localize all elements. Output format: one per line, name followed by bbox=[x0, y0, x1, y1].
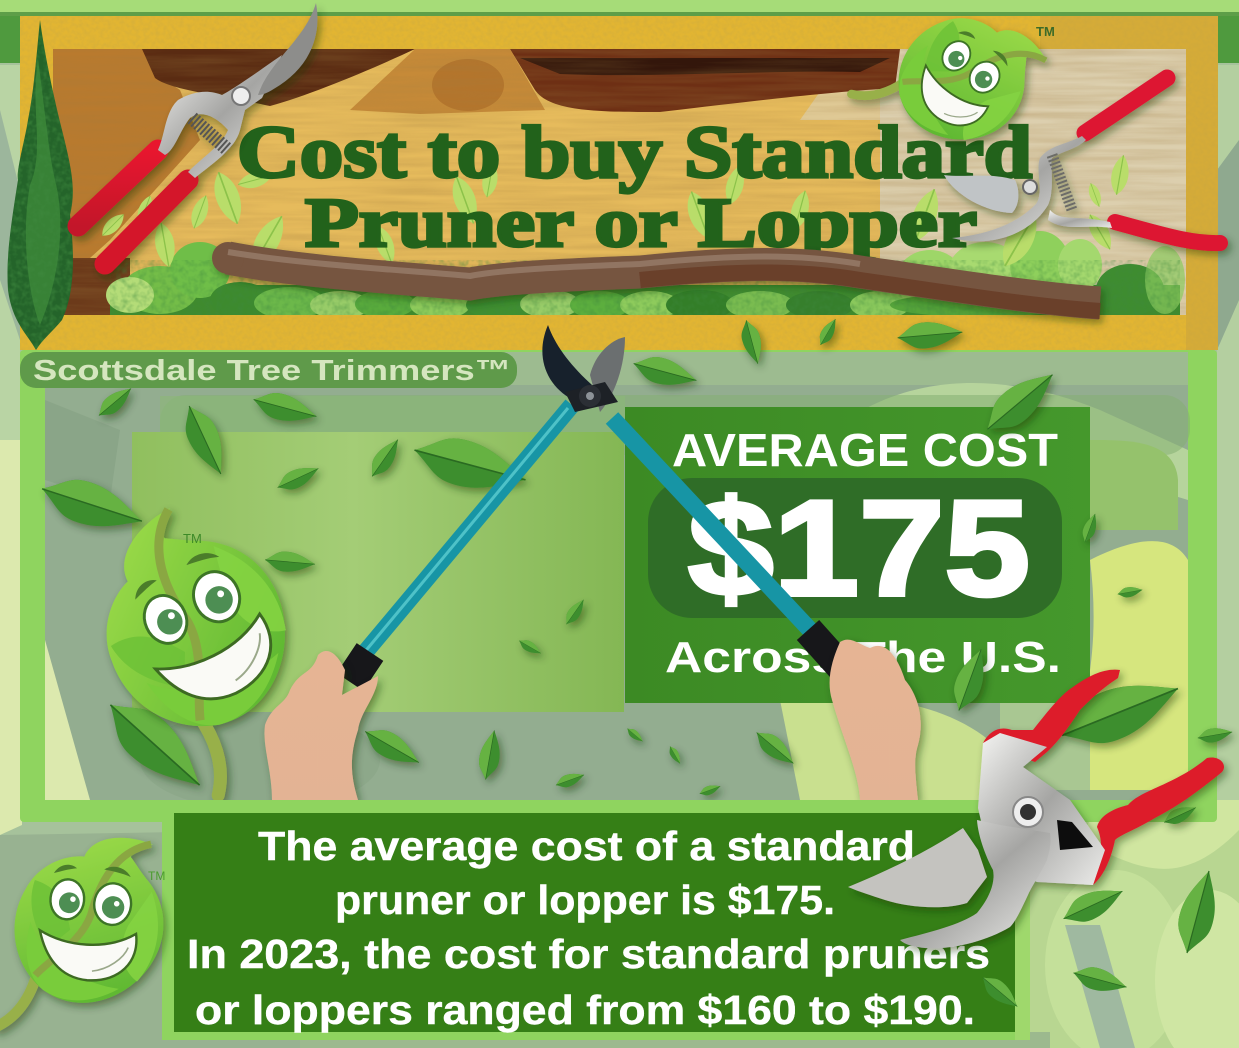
panel: bottom explanation bbox=[162, 800, 1030, 1040]
teal handles bbox=[352, 405, 572, 668]
pale leaves behind title bbox=[98, 154, 1132, 272]
right hand bbox=[830, 640, 921, 800]
explanation text: In 2023, the cost for standard pruners bbox=[187, 931, 990, 977]
title: Pruner or Lopper bbox=[305, 185, 977, 262]
icon: top-right pruner bbox=[944, 78, 1220, 243]
inner green rectangle bbox=[132, 432, 624, 712]
wood board bbox=[53, 49, 1186, 320]
panel: main lower panel bbox=[20, 350, 1217, 822]
title bbox=[237, 112, 1032, 262]
dark wood band bbox=[142, 49, 415, 106]
icon: top-left pruner bbox=[78, 3, 318, 264]
top green bars bbox=[0, 0, 1239, 63]
bottom leaves bbox=[977, 867, 1225, 1013]
mascot: header bbox=[839, 0, 1061, 166]
mascot: left bbox=[77, 487, 324, 813]
left hand bbox=[264, 651, 378, 800]
brand pill: Scottsdale Tree Trimmers™ bbox=[33, 355, 511, 387]
explanation text bbox=[187, 823, 990, 1033]
across the us label: Across The U.S. bbox=[665, 633, 1061, 682]
trademark: bottom mascot: TM bbox=[148, 869, 165, 883]
blades bbox=[542, 325, 592, 400]
trademark: header mascot: TM bbox=[1036, 24, 1055, 39]
panel: average cost box bbox=[625, 407, 1090, 703]
brand pill bbox=[20, 352, 517, 388]
icon: cypress tree bbox=[6, 20, 78, 350]
scattered leaves bbox=[36, 351, 1233, 829]
icon: lopper with hands bbox=[264, 325, 921, 800]
title: Cost to buy Standard bbox=[237, 112, 1032, 194]
black grips bbox=[350, 652, 370, 682]
explanation text: pruner or lopper is $175. bbox=[335, 877, 835, 923]
panel: header frame bbox=[20, 16, 1218, 350]
price value: $175 bbox=[688, 472, 1030, 624]
price pill bbox=[648, 478, 1062, 618]
mascot: bottom left bbox=[0, 799, 208, 1048]
foliage strip bbox=[106, 231, 1185, 320]
pale background leaves bbox=[780, 697, 1020, 800]
explanation text: The average cost of a standard bbox=[258, 823, 915, 869]
explanation text: or loppers ranged from $160 to $190. bbox=[195, 987, 975, 1033]
icon: large silver pruner bbox=[848, 670, 1224, 948]
trademark: left mascot: TM bbox=[183, 531, 202, 546]
branch bbox=[212, 242, 1100, 311]
header bottom leaves bbox=[737, 316, 964, 366]
average cost label: AVERAGE COST bbox=[672, 424, 1058, 476]
